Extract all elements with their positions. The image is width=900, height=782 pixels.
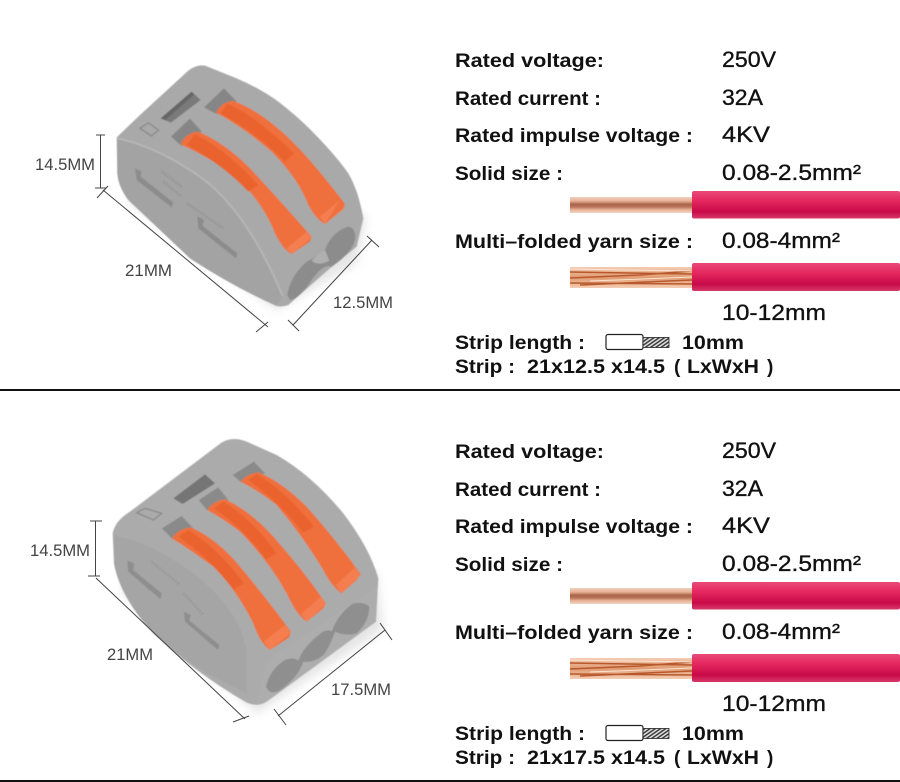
window slot [173,474,215,504]
spec: strip dimensions: 21x17.5 x14.5 [527,748,665,769]
lever slot back [204,88,237,114]
icon: stripped wire diagram [606,334,669,350]
spec: multi-folded yarn size [455,228,840,253]
lever back [216,101,345,224]
lever right [241,472,361,593]
front face holes [266,603,369,692]
dimension: length 21MM [97,186,268,332]
spec: solid size: 0.08-2.5mm² [722,551,861,576]
spec: solid size: Solid size : [455,164,563,185]
dimension: width 17.5MM [274,623,392,725]
body [113,439,378,705]
strip length note: 10-12mm [722,300,826,325]
side face [117,138,283,306]
spec: strip length [455,333,744,354]
spec: multi-folded yarn size: Multi–folded yarn size : [455,232,693,253]
body [117,65,363,306]
spec: rated impulse voltage [455,513,770,538]
spec: rated voltage [455,47,776,72]
spec: solid size: 0.08-2.5mm² [722,160,861,185]
dimension: height 14.5MM [35,135,106,188]
spec: strip length: Strip length : [455,333,585,354]
spec: multi-folded yarn size: 0.08-4mm² [722,228,840,253]
spec: strip length: 10mm [682,724,744,745]
spec: rated current: Rated current : [455,480,601,501]
front face holes [287,227,355,300]
spec: strip dimensions: ) [767,357,773,378]
dimension: length 21MM [96,578,249,722]
spec: rated current: 32A [722,85,763,110]
spec: rated voltage [455,438,776,463]
spec: rated impulse voltage: Rated impulse voltage : [455,517,693,538]
icon: stranded wire [570,263,900,291]
spec: solid size [455,551,861,576]
spec: rated current [455,476,763,501]
logo mark [137,508,162,520]
icon: stripped wire diagram [606,726,669,740]
moulded side text [152,562,203,615]
spec: strip length [455,724,744,745]
side clips [127,561,162,599]
spec: rated current: 32A [722,476,763,501]
spec: rated voltage: 250V [722,438,776,463]
spec: strip dimensions: ( [674,748,681,769]
icon: solid wire [570,582,900,610]
icon: solid wire [570,191,900,218]
spec: rated current [455,85,763,110]
spec: strip length: 10mm [682,333,744,354]
side clips [135,168,173,207]
dimension: width 12.5MM: 12.5MM [333,293,393,312]
divider line [0,389,900,391]
spec: rated voltage: Rated voltage: [455,442,604,463]
dimension: height 14.5MM: 14.5MM [35,155,95,174]
lever left [172,528,291,650]
spec: multi-folded yarn size: 0.08-4mm² [722,619,840,644]
window slot [161,92,201,123]
dimension: width 12.5MM [288,236,393,331]
dimension: length 21MM: 21MM [125,261,172,280]
dimension: height 14.5MM [30,521,102,576]
spec: multi-folded yarn size [455,619,840,644]
side face edge highlight [117,138,283,296]
spec: multi-folded yarn size: Multi–folded yarn size : [455,623,693,644]
dimension: width 17.5MM: 17.5MM [331,680,391,699]
lever middle [207,499,326,622]
spec: rated impulse voltage: 4KV [722,513,770,538]
specifications: three-way [455,438,900,769]
spec: rated impulse voltage [455,122,770,147]
spec: strip dimensions: Strip : [455,748,515,769]
spec: strip dimensions: ) [767,748,773,769]
strip length note: 10-12mm [722,691,826,716]
spec: rated voltage: 250V [722,47,776,72]
dimension: height 14.5MM: 14.5MM [30,541,90,560]
spec: strip length: Strip length : [455,724,585,745]
divider line [0,780,900,782]
spec: rated voltage: Rated voltage: [455,51,604,72]
spec: strip dimensions: LxWxH [687,748,759,769]
lever front [181,132,312,254]
lever slots [162,516,193,539]
spec: strip dimensions: ( [674,357,681,378]
connector product image: three-way [113,439,383,713]
panel: three-way connector [30,439,392,725]
moulded side text [162,172,223,228]
logo mark [140,123,158,136]
lever slot front [171,118,202,146]
spec: strip dimensions: Strip : [455,357,515,378]
connector product image: two-way [117,65,367,310]
specifications: two-way [455,47,900,378]
spec: rated impulse voltage: Rated impulse voltage : [455,126,693,147]
panel: two-way connector [35,65,393,332]
spec: rated current: Rated current : [455,89,601,110]
spec: strip dimensions [455,748,773,769]
spec: strip dimensions: LxWxH [687,357,759,378]
front rim shade [257,587,377,705]
spec: strip dimensions: 21x12.5 x14.5 [527,357,665,378]
side face [114,536,247,693]
spec: strip dimensions [455,357,773,378]
spec: rated impulse voltage: 4KV [722,122,770,147]
icon: stranded wire [570,654,900,682]
spec: solid size [455,160,861,185]
dimension: length 21MM: 21MM [107,645,153,664]
spec: solid size: Solid size : [455,555,563,576]
